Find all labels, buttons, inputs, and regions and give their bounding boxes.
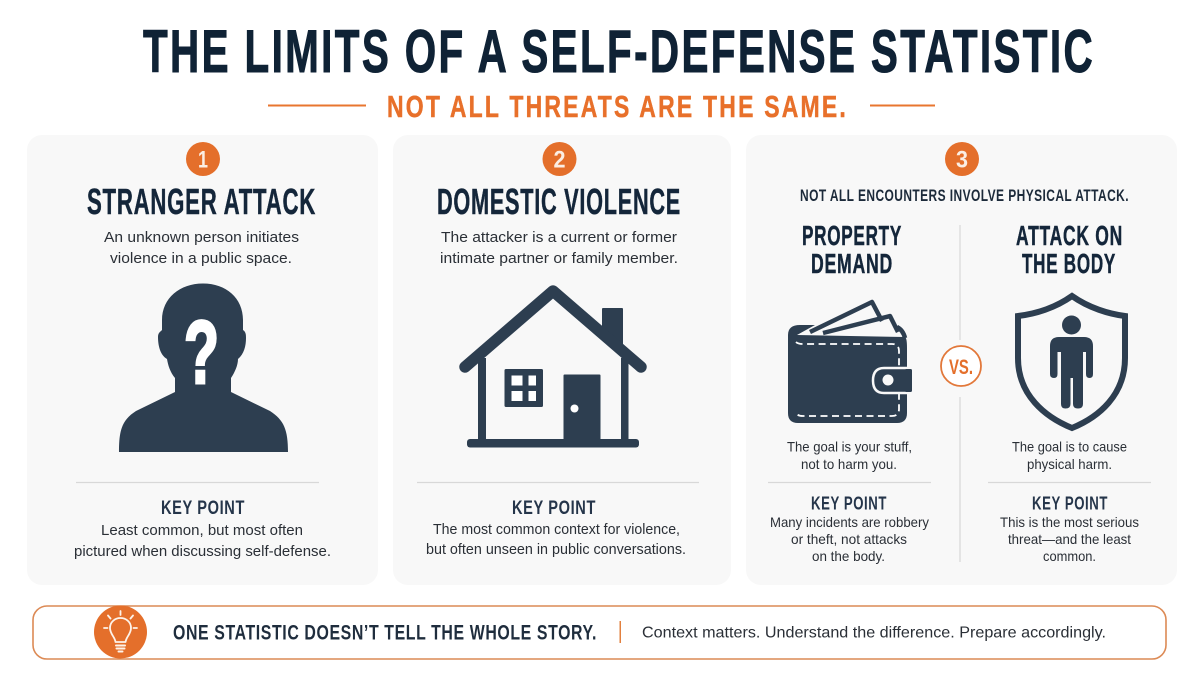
heading: property demand: PROPERTY (802, 220, 902, 251)
heading: property demand: DEMAND (811, 248, 893, 279)
heading: stranger attack: STRANGER ATTACK (87, 181, 316, 222)
divider (959, 225, 961, 562)
icon: light bulb (94, 606, 147, 658)
heading: domestic violence: DOMESTIC VIOLENCE (437, 181, 681, 222)
description: intimate partner or family member. (440, 250, 678, 267)
banner: takeaway (33, 606, 1166, 659)
key point: property: or theft, not attacks (791, 531, 907, 547)
description: The attacker is a current or former (441, 229, 677, 246)
number badge 1 (186, 142, 220, 176)
key point: domestic violence: The most common context for violence, (433, 521, 680, 538)
description: body (1012, 438, 1127, 472)
icon: unknown person silhouette (119, 284, 288, 452)
key point: stranger attack: pictured when discussing self-defense. (74, 543, 331, 560)
key point: body: This is the most serious (1000, 514, 1139, 530)
description: violence in a public space. (110, 250, 292, 267)
key point: stranger attack: KEY POINT (161, 498, 245, 519)
key point: property: Many incidents are robbery (770, 514, 929, 530)
key point: body: threat—and the least (1008, 531, 1131, 547)
description: property (787, 438, 912, 472)
key point: body: KEY POINT (1032, 494, 1108, 514)
panel: property vs body (746, 135, 1177, 585)
icon: house (465, 291, 641, 448)
heading: attack on the body (1016, 220, 1123, 279)
key point: stranger attack: Least common, but most often (101, 522, 303, 539)
key point: body (1000, 494, 1139, 564)
banner headline: ONE STATISTIC DOESN’T TELL THE WHOLE STORY. (173, 622, 597, 644)
icon: wallet (788, 302, 912, 423)
icon: unknown person silhouette: ? (184, 302, 219, 402)
key point: property (770, 494, 929, 564)
number badge 2 (542, 142, 576, 176)
key point: domestic violence: KEY POINT (512, 498, 596, 519)
heading: attack on the body: THE BODY (1022, 248, 1116, 279)
number badge 3 (945, 142, 979, 176)
description (104, 229, 299, 267)
key point: body: common. (1043, 548, 1096, 564)
number badge 3: 3 (956, 146, 968, 174)
key point: stranger attack (74, 498, 331, 560)
description: body: physical harm. (1027, 456, 1112, 472)
panel: stranger attack (27, 135, 378, 585)
heading: attack on the body: ATTACK ON (1016, 220, 1123, 251)
key point: domestic violence: but often unseen in public conversations. (426, 541, 686, 558)
description: property: The goal is your stuff, (787, 438, 912, 454)
subtitle with side rules: NOT ALL THREATS ARE THE SAME. (387, 89, 848, 124)
key point: domestic violence (426, 498, 686, 558)
icon: vs badge (941, 346, 981, 386)
description (440, 229, 678, 267)
key point: property: on the body. (812, 548, 885, 564)
description: body: The goal is to cause (1012, 438, 1127, 454)
icon: shield with person (1018, 296, 1125, 428)
panel: domestic violence (393, 135, 731, 585)
number badge 2: 2 (554, 146, 566, 174)
icon: vs badge: VS. (949, 356, 973, 379)
description: An unknown person initiates (104, 229, 299, 246)
key point: property: KEY POINT (811, 494, 887, 514)
description: property: not to harm you. (801, 456, 897, 472)
banner message: Context matters. Understand the difference. Prepare accordingly. (642, 624, 1106, 642)
heading: property demand (802, 220, 902, 279)
number badge 1: 1 (198, 146, 208, 174)
